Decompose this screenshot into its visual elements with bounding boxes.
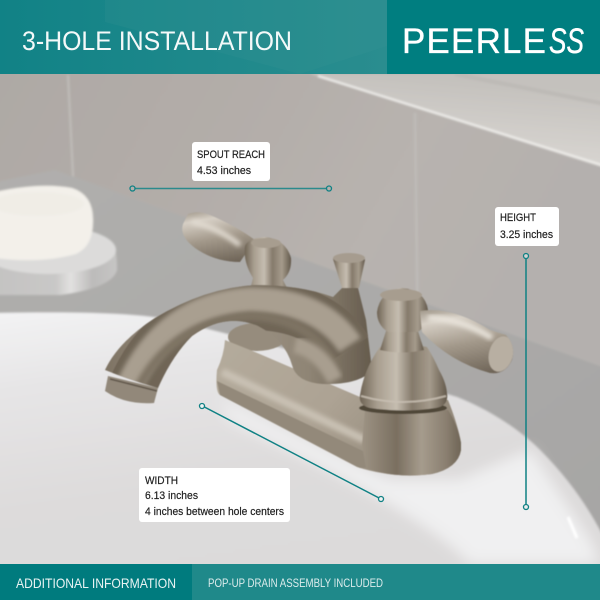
- callout: width: 6.13 inches: [145, 490, 198, 502]
- callout: height: 3.25 inches: [500, 229, 553, 241]
- callout: height: HEIGHT: [500, 212, 536, 224]
- logo: PEERLE: [402, 22, 546, 61]
- right knob: [377, 288, 428, 332]
- callout: height: [495, 207, 559, 510]
- soap dish: [0, 240, 117, 295]
- callout: spout reach: SPOUT REACH: [197, 149, 265, 161]
- footer text: POP-UP DRAIN ASSEMBLY INCLUDED: [208, 578, 383, 590]
- right handle neck: [380, 328, 424, 352]
- pop-up drain knob: [333, 254, 365, 288]
- callout: width: 4 inches between hole centers: [145, 506, 284, 518]
- base highlight band: [222, 372, 365, 440]
- callout: spout reach: 4.53 inches: [197, 165, 251, 177]
- bell shadow: [359, 402, 447, 414]
- logo: SS: [549, 22, 584, 61]
- shelf ledge: [310, 74, 600, 168]
- wall: [0, 70, 600, 400]
- left lever handle: [182, 212, 254, 262]
- footer heading: ADDITIONAL INFORMATION: [16, 575, 176, 591]
- soap bar: [0, 186, 93, 260]
- sink rim highlight: [220, 400, 600, 564]
- footer right panel: [0, 564, 600, 600]
- callout: width: [139, 404, 384, 522]
- sink basin: [0, 313, 600, 600]
- callout: spout reach: [130, 142, 332, 191]
- base lower band: [217, 381, 395, 468]
- header banner: [0, 0, 600, 74]
- tile grout lines: [68, 75, 418, 345]
- callout: width: WIDTH: [145, 475, 178, 487]
- left handle escutcheon: [228, 323, 286, 351]
- base plate: [216, 340, 461, 475]
- footer left panel: [0, 564, 192, 600]
- spout: [104, 284, 372, 388]
- counter top: [0, 170, 600, 600]
- title: 3-HOLE INSTALLATION: [22, 26, 292, 56]
- left knob: [245, 237, 291, 290]
- footer banner: [0, 564, 600, 600]
- faucet: [95, 205, 520, 476]
- right handle bell: [360, 344, 447, 410]
- header left panel: [0, 0, 387, 74]
- header right panel: [387, 0, 600, 74]
- spout nozzle: [105, 376, 158, 403]
- right lever handle: [420, 310, 513, 374]
- base end cap: [362, 410, 461, 476]
